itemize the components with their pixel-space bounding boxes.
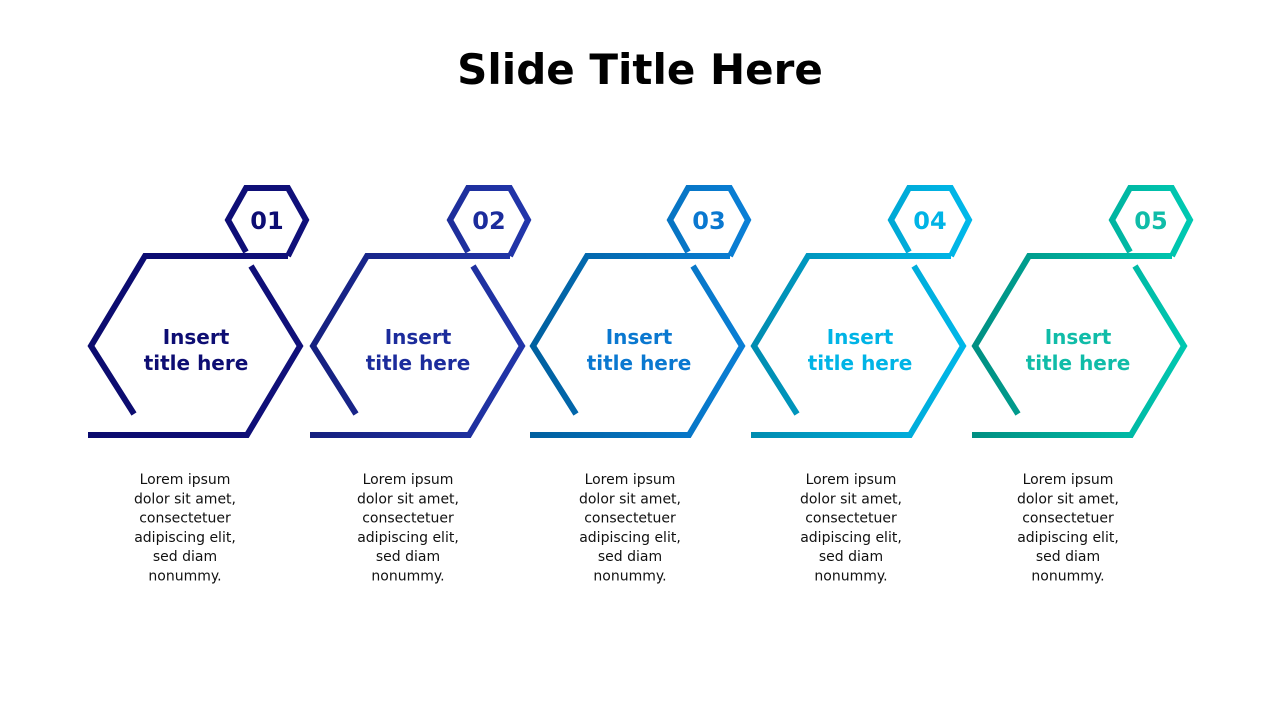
heading 02: title here — [366, 351, 470, 375]
body text 03: consectetuer — [584, 511, 676, 527]
body text 03: sed diam — [598, 549, 662, 565]
number 03: 03 — [692, 207, 726, 235]
body text 05: Lorem ipsum — [1023, 472, 1113, 488]
heading 04: Insert — [827, 325, 894, 349]
body text 02: sed diam — [376, 549, 440, 565]
step 04 — [751, 188, 969, 584]
body text 05: adipiscing elit, — [1017, 530, 1119, 546]
body text 02: consectetuer — [362, 511, 454, 527]
body text 01: dolor sit amet, — [134, 491, 236, 507]
body text 02: Lorem ipsum — [363, 472, 453, 488]
body text 05: dolor sit amet, — [1017, 491, 1119, 507]
body text 04: sed diam — [819, 549, 883, 565]
heading 05: title here — [1026, 351, 1130, 375]
title: Slide Title Here — [457, 45, 823, 94]
hexagon outline 02 — [310, 256, 522, 435]
hexagon outline 04 — [751, 256, 963, 435]
heading 03: Insert — [606, 325, 673, 349]
body text 04: Lorem ipsum — [806, 472, 896, 488]
body text 01: adipiscing elit, — [134, 530, 236, 546]
body text 01: nonummy. — [148, 568, 222, 584]
body text 02: adipiscing elit, — [357, 530, 459, 546]
heading 01: Insert — [163, 325, 230, 349]
heading 05: Insert — [1045, 325, 1112, 349]
number 02: 02 — [472, 207, 506, 235]
hexagon outline 03 — [530, 256, 742, 435]
badge hexagon 05 — [1112, 188, 1190, 256]
badge hexagon 01 — [228, 188, 306, 256]
badge hexagon 03 — [670, 188, 748, 256]
body text 04: nonummy. — [814, 568, 888, 584]
body text 05: nonummy. — [1031, 568, 1105, 584]
body text 04: dolor sit amet, — [800, 491, 902, 507]
badge hexagon 02 — [450, 188, 528, 256]
body text 05: sed diam — [1036, 549, 1100, 565]
heading 03: title here — [587, 351, 691, 375]
step 01 — [88, 188, 306, 584]
number 04: 04 — [913, 207, 947, 235]
body text 03: Lorem ipsum — [585, 472, 675, 488]
heading 01: title here — [144, 351, 248, 375]
body text 01: sed diam — [153, 549, 217, 565]
heading 04: title here — [808, 351, 912, 375]
body text 04: consectetuer — [805, 511, 897, 527]
body text 03: adipiscing elit, — [579, 530, 681, 546]
step 05 — [972, 188, 1190, 584]
number 01: 01 — [250, 207, 284, 235]
body text 02: dolor sit amet, — [357, 491, 459, 507]
body text 03: nonummy. — [593, 568, 667, 584]
body text 04: adipiscing elit, — [800, 530, 902, 546]
step 03 — [530, 188, 748, 584]
body text 01: Lorem ipsum — [140, 472, 230, 488]
body text 01: consectetuer — [139, 511, 231, 527]
body text 03: dolor sit amet, — [579, 491, 681, 507]
hexagon outline 01 — [88, 256, 300, 435]
heading 02: Insert — [385, 325, 452, 349]
badge hexagon 04 — [891, 188, 969, 256]
body text 05: consectetuer — [1022, 511, 1114, 527]
number 05: 05 — [1134, 207, 1168, 235]
hexagon outline 05 — [972, 256, 1184, 435]
body text 02: nonummy. — [371, 568, 445, 584]
step 02 — [310, 188, 528, 584]
